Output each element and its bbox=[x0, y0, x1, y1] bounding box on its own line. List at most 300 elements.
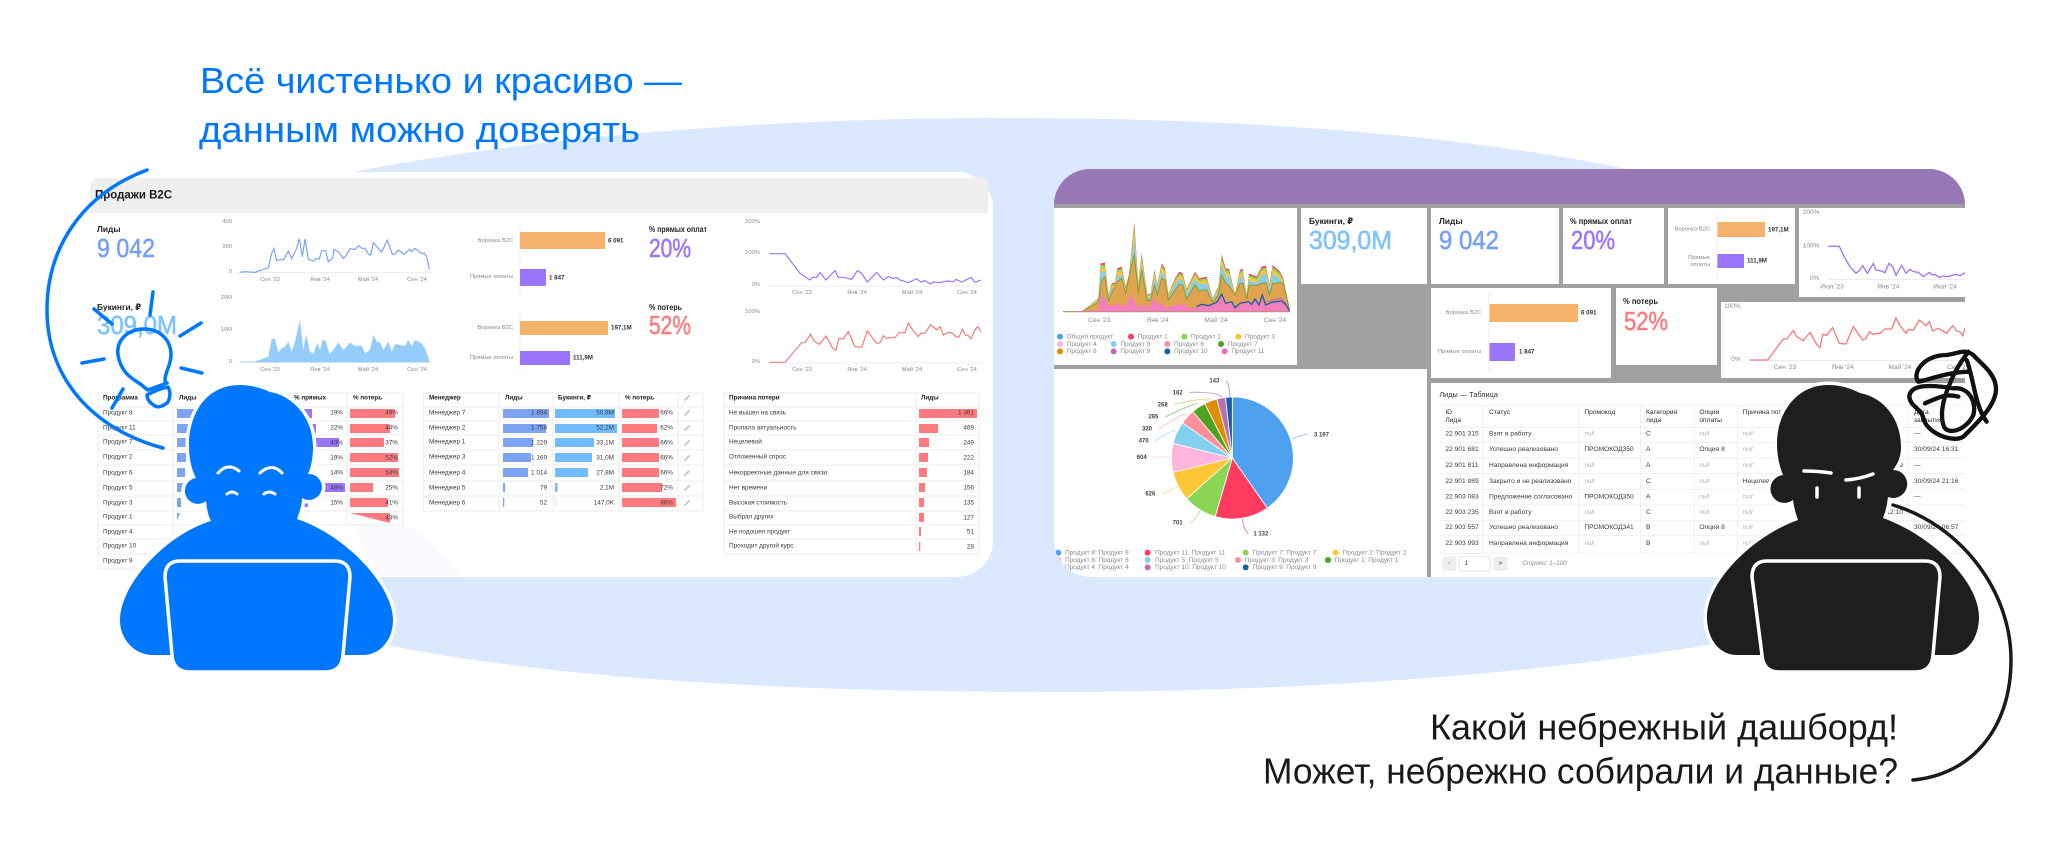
line chart: direct payments share: Сен '23 bbox=[792, 290, 812, 296]
purple header bbox=[1054, 169, 1965, 204]
background ellipse bbox=[230, 118, 1810, 692]
pie chart panel: Продукт 4: Продукт 4 bbox=[1065, 564, 1129, 571]
line chart: direct payments share: 0% bbox=[1810, 275, 1820, 282]
KPI: losses: 52% bbox=[1624, 308, 1668, 336]
title: clean dashboard caption: Всё чистенько и красиво — bbox=[200, 60, 683, 101]
line chart: losses share: 100% bbox=[745, 309, 760, 315]
table panel: ПРОМОКОД341 bbox=[1584, 524, 1634, 531]
area chart: bookings: Сен '23 bbox=[260, 367, 280, 373]
table panel: Направлена информация bbox=[1489, 462, 1569, 469]
table panel: Лида bbox=[1445, 417, 1461, 424]
table: managers: 1 014 bbox=[531, 470, 547, 476]
table: managers: 79 bbox=[540, 484, 547, 492]
table: products: Программа bbox=[103, 394, 138, 402]
table panel: лида bbox=[1646, 417, 1661, 424]
table panel: C bbox=[1646, 478, 1651, 485]
KPI: losses bbox=[1616, 288, 1717, 365]
KPI: bookings: Букинги, ₽ bbox=[1309, 216, 1353, 226]
line chart: leads: 200 bbox=[222, 244, 232, 250]
table panel: Взят в работу bbox=[1489, 429, 1532, 437]
table: loss reasons: 156 bbox=[963, 484, 974, 492]
table panel: null bbox=[1699, 462, 1710, 469]
table: products: Продукт 9 bbox=[103, 558, 133, 564]
KPI: direct payments bbox=[1563, 208, 1664, 284]
funnel chart: leads: 6 091 bbox=[608, 238, 624, 244]
stacked area chart panel bbox=[1054, 208, 1297, 365]
line chart: direct payments share: 100% bbox=[1803, 242, 1820, 249]
table panel: null bbox=[1584, 540, 1595, 547]
KPI: leads: 9 042 bbox=[1439, 227, 1499, 255]
laptop bbox=[1752, 561, 1940, 672]
table: products: 22% bbox=[330, 424, 343, 432]
stacked area chart panel: Продукт 8 bbox=[1067, 348, 1097, 355]
table: managers: 1 229 bbox=[531, 440, 547, 446]
table panel: C bbox=[1646, 509, 1651, 516]
table panel: null bbox=[1584, 478, 1595, 485]
pie chart panel: 626 bbox=[1145, 492, 1156, 498]
table panel: 30/09/24 12:49 bbox=[1859, 462, 1903, 469]
area chart: bookings: 10M bbox=[221, 327, 232, 333]
line chart: leads: 400 bbox=[222, 219, 232, 225]
KPI: leads bbox=[1431, 208, 1559, 284]
table panel: ID bbox=[1445, 409, 1452, 416]
table: managers: 52,2M bbox=[596, 424, 614, 432]
pie chart panel: 1 132 bbox=[1253, 532, 1269, 538]
line chart: direct payments share: 200% bbox=[1803, 209, 1820, 216]
stacked area chart panel: Продукт 5 bbox=[1120, 341, 1151, 348]
KPI: bookings: 309,0M bbox=[97, 312, 177, 340]
line chart: leads: Сен '23 bbox=[260, 277, 280, 283]
pie chart panel: Продукт 6: Продукт 6 bbox=[1065, 557, 1129, 564]
table panel: < bbox=[1447, 560, 1451, 567]
table panel: Категория bbox=[1646, 409, 1678, 416]
table: managers: 147,0K bbox=[594, 500, 615, 506]
KPI: leads: 9 042 bbox=[97, 235, 155, 263]
stacked area chart panel: Продукт 6 bbox=[1174, 341, 1204, 348]
table panel: null bbox=[1699, 509, 1710, 516]
bar chart: bookings funnel: 111,9M bbox=[1747, 258, 1767, 264]
table: products: 52% bbox=[385, 454, 398, 462]
table: products: 48% bbox=[330, 484, 343, 492]
table panel: 1 bbox=[1464, 560, 1468, 567]
table panel: 30/09/24 11:49 bbox=[1859, 493, 1903, 500]
pie chart panel: Продукт 5: Продукт 5 bbox=[1155, 557, 1219, 564]
KPI: bookings: Букинги, ₽ bbox=[97, 302, 141, 312]
funnel chart: bookings bbox=[470, 312, 632, 373]
KPI: losses: % потерь bbox=[649, 302, 682, 312]
line chart: direct payments share: Янв '24 bbox=[847, 290, 868, 296]
funnel chart: bookings: 197,1M bbox=[611, 324, 632, 332]
table: products: 44% bbox=[385, 424, 398, 432]
KPI: losses: % потерь bbox=[1623, 296, 1658, 306]
line chart: direct payments share: Сен '24 bbox=[957, 290, 978, 296]
table: loss reasons: Причина потери bbox=[729, 394, 780, 402]
table: products: 41% bbox=[385, 500, 398, 506]
table: loss reasons: 184 bbox=[963, 470, 974, 476]
table: loss reasons: Выбрал других bbox=[729, 512, 774, 520]
table: managers: 72% bbox=[660, 484, 673, 492]
table panel: закрытия bbox=[1914, 417, 1943, 424]
table: products: Продукт 5 bbox=[103, 484, 133, 492]
table: managers: Менеджер 1 bbox=[429, 438, 466, 446]
funnel chart: leads: Воронка B2C bbox=[477, 238, 513, 244]
table panel: 22 901 315 bbox=[1445, 430, 1479, 437]
table: managers: 50,8M bbox=[596, 410, 614, 416]
table panel: null bbox=[1743, 540, 1753, 547]
table: managers: 66% bbox=[660, 440, 673, 446]
table panel: — bbox=[1914, 430, 1921, 437]
line chart: direct payments share: Июл '23 bbox=[1820, 283, 1844, 290]
line chart: leads: 0 bbox=[229, 269, 232, 275]
pie chart panel: 295 bbox=[1148, 415, 1159, 421]
table panel: Направлена информация bbox=[1489, 540, 1569, 547]
table panel: Опция 8 bbox=[1699, 446, 1725, 453]
KPI: leads bbox=[97, 224, 155, 263]
table: products: 14% bbox=[330, 470, 343, 476]
table: products: Продукт 6 bbox=[103, 470, 133, 476]
stacked area chart panel: Продукт 1 bbox=[1138, 333, 1168, 340]
bar chart: bookings funnel: Воронка B2C bbox=[1674, 226, 1710, 232]
line chart: direct payments share: 200% bbox=[745, 219, 760, 225]
line chart: leads bbox=[222, 219, 432, 283]
table panel: оплаты bbox=[1699, 417, 1722, 424]
table: loss reasons: 222 bbox=[963, 454, 974, 462]
table: managers: 52 bbox=[540, 500, 547, 506]
pie chart panel: Продукт 3: Продукт 3 bbox=[1245, 557, 1309, 564]
dashboard header: Продажи B2C bbox=[95, 188, 173, 202]
table panel: B bbox=[1646, 540, 1651, 547]
table: loss reasons: Отложенный спрос bbox=[729, 452, 787, 460]
pie chart panel: Продукт 11: Продукт 11 bbox=[1155, 549, 1225, 556]
table panel: Причина потери bbox=[1743, 409, 1793, 416]
pie chart panel: Продукт 1: Продукт 1 bbox=[1335, 557, 1399, 564]
table panel: Статус bbox=[1489, 409, 1511, 416]
table panel: Опции bbox=[1699, 409, 1720, 416]
bar chart: leads funnel: 1 847 bbox=[1519, 348, 1535, 356]
line chart: leads: Янв '24 bbox=[310, 277, 331, 283]
stacked area chart panel: Продукт 7 bbox=[1228, 341, 1258, 348]
stacked area chart panel: Продукт 2 bbox=[1191, 333, 1221, 340]
table: managers bbox=[423, 393, 703, 511]
table panel: null bbox=[1743, 493, 1753, 500]
table: loss reasons: 249 bbox=[963, 440, 974, 446]
stacked area chart panel: Продукт 9 bbox=[1120, 348, 1151, 355]
table panel: > bbox=[1498, 560, 1502, 567]
pie chart panel: Продукт 9: Продукт 9 bbox=[1253, 564, 1317, 571]
table panel: 30/09/24 06:57 bbox=[1914, 524, 1959, 531]
laptop bbox=[165, 561, 350, 672]
line chart: direct payments share bbox=[745, 219, 983, 296]
table: managers: 66% bbox=[660, 410, 673, 416]
bar chart: leads funnel: 6 091 bbox=[1581, 310, 1597, 316]
table panel: Закрыто и не реализовано bbox=[1489, 478, 1572, 485]
table panel: B bbox=[1646, 524, 1651, 531]
table: managers: 1 894 bbox=[531, 410, 547, 416]
KPI: direct payments: % прямых оплат bbox=[649, 224, 707, 234]
table panel: null bbox=[1584, 509, 1595, 516]
bar chart: bookings funnel bbox=[1668, 208, 1795, 284]
table panel: A bbox=[1646, 446, 1651, 453]
table: managers: % потерь bbox=[625, 394, 654, 402]
table: products: 25% bbox=[385, 484, 398, 492]
table: managers: Менеджер 7 bbox=[429, 410, 466, 416]
table panel: 22 901 811 bbox=[1445, 462, 1478, 469]
table panel: Опция 8 bbox=[1699, 524, 1725, 531]
table panel: 30/09/24 12:10 bbox=[1859, 509, 1903, 516]
line chart: losses share bbox=[745, 309, 983, 373]
table panel: null bbox=[1584, 462, 1595, 469]
table: managers: 2,1M bbox=[600, 484, 614, 492]
table panel: 22 901 989 bbox=[1445, 478, 1479, 485]
table: managers: Менеджер bbox=[429, 394, 461, 402]
table panel: Успешно реализовано bbox=[1489, 446, 1558, 453]
table: loss reasons: Проходит другой курс bbox=[729, 542, 794, 550]
table: loss reasons: Высокая стоимость bbox=[729, 500, 788, 506]
KPI: leads: Лиды bbox=[97, 224, 120, 234]
table: products: 49% bbox=[385, 410, 398, 416]
table: products: % прямых bbox=[294, 394, 327, 402]
title: clean dashboard caption: данным можно доверять bbox=[199, 109, 640, 150]
line chart: losses share: Янв '24 bbox=[847, 367, 868, 373]
line chart: losses share: Сен '23 bbox=[792, 367, 812, 373]
table panel bbox=[1431, 383, 1965, 577]
stacked area chart panel: Общий продукт bbox=[1067, 332, 1113, 340]
KPI: direct payments: 20% bbox=[1571, 227, 1615, 255]
table panel: — bbox=[1914, 493, 1921, 500]
area chart: bookings bbox=[221, 295, 432, 373]
title: clean dashboard caption bbox=[199, 60, 683, 150]
line chart: direct payments share: 100% bbox=[745, 250, 760, 256]
line chart: losses share: Янв '24 bbox=[1832, 364, 1854, 371]
scribble bbox=[1909, 352, 1996, 439]
dashboard header bbox=[90, 178, 988, 213]
table panel: null bbox=[1743, 524, 1753, 531]
line chart: leads: Сен '24 bbox=[407, 277, 428, 283]
area chart: bookings: 0 bbox=[229, 359, 232, 365]
table panel: C bbox=[1646, 430, 1651, 437]
table panel: 22 903 235 bbox=[1445, 509, 1479, 516]
table panel: — bbox=[1914, 462, 1921, 469]
table panel: 22 901 681 bbox=[1445, 446, 1479, 453]
table: loss reasons: Нецелевой bbox=[729, 438, 762, 446]
table: managers: 66% bbox=[660, 454, 673, 462]
table: managers: 33,1M bbox=[596, 440, 614, 446]
funnel chart: leads: Прямые оплаты bbox=[470, 274, 513, 280]
table: loss reasons: 1 361 bbox=[958, 410, 974, 416]
arc around the idea bbox=[47, 170, 163, 448]
table panel: Предложение согласовано bbox=[1489, 493, 1573, 500]
table panel: 30/09/24 16:31 bbox=[1914, 446, 1959, 453]
KPI: direct payments: % прямых оплат bbox=[1570, 216, 1632, 226]
table: products: 19% bbox=[330, 454, 343, 462]
stacked area chart panel: Янв '24 bbox=[1147, 317, 1169, 324]
line chart: losses share bbox=[1721, 302, 1970, 378]
funnel chart: bookings: 111,9M bbox=[573, 354, 593, 362]
table: managers: 66% bbox=[660, 470, 673, 476]
pie chart panel: 268 bbox=[1158, 403, 1168, 409]
table panel: Строки: 1–100 bbox=[1522, 560, 1567, 567]
line chart: direct payments share: 0% bbox=[752, 282, 760, 288]
table panel: A bbox=[1646, 462, 1651, 469]
table: products bbox=[98, 393, 403, 569]
table: managers: 96% bbox=[660, 500, 673, 506]
table: products: Продукт 7 bbox=[103, 438, 133, 446]
table panel: Лиды — Таблица bbox=[1439, 390, 1499, 399]
funnel chart: leads: 1 847 bbox=[549, 274, 565, 282]
table: managers: Букинги, ₽ bbox=[558, 394, 592, 402]
table panel: Промокод bbox=[1584, 409, 1615, 416]
table panel: null bbox=[1584, 430, 1595, 437]
line chart: direct payments share: Май '24 bbox=[902, 289, 923, 296]
table: products: % потерь bbox=[353, 394, 382, 402]
table: products: 54% bbox=[385, 470, 398, 476]
table: loss reasons: Лиды bbox=[921, 394, 939, 402]
table: loss reasons bbox=[724, 393, 979, 554]
caption: messy dashboard: Какой небрежный дашборд! bbox=[1430, 706, 1898, 748]
table panel: Взят в работу bbox=[1489, 508, 1532, 516]
table: loss reasons: Не вышел на связь bbox=[729, 410, 787, 416]
table panel: null bbox=[1743, 430, 1753, 437]
table: managers: 62% bbox=[660, 424, 673, 432]
table: managers: 27,8M bbox=[596, 470, 614, 476]
table: products: Лиды bbox=[179, 394, 197, 402]
table: managers: 31,0M bbox=[596, 454, 614, 462]
table: products: Продукт 1 bbox=[103, 514, 133, 520]
stacked area chart panel: Сен '24 bbox=[1264, 317, 1286, 324]
bar chart: bookings funnel: Прямые bbox=[1688, 255, 1710, 261]
pie chart panel: Продукт 10: Продукт 10 bbox=[1155, 564, 1226, 571]
table panel: 22 903 557 bbox=[1445, 524, 1479, 531]
table: loss reasons: Нет времени bbox=[729, 484, 768, 492]
funnel chart: leads bbox=[470, 222, 624, 295]
table: products: 19% bbox=[330, 410, 343, 416]
line chart: direct payments share: Июл '24 bbox=[1933, 283, 1957, 290]
pie chart panel: 470 bbox=[1139, 438, 1149, 444]
pie chart panel: 701 bbox=[1173, 521, 1183, 527]
KPI: bookings bbox=[1301, 208, 1427, 284]
pie chart panel: 320 bbox=[1142, 426, 1153, 432]
table panel: ПРОМОКОД350 bbox=[1584, 493, 1634, 500]
KPI: losses: 52% bbox=[649, 312, 691, 340]
table: managers: 1 169 bbox=[531, 454, 547, 462]
area chart: bookings: Сен '24 bbox=[407, 367, 428, 373]
table: products: Продукт 4 bbox=[103, 528, 133, 536]
line chart: direct payments share: Янв '24 bbox=[1877, 283, 1900, 290]
table: managers: Менеджер 2 bbox=[429, 424, 466, 432]
table panel: 22 903 993 bbox=[1445, 540, 1479, 547]
table panel: ПРОМОКОД350 bbox=[1584, 446, 1634, 453]
pie chart panel: Продукт 8: Продукт 8 bbox=[1065, 549, 1129, 556]
table: products: Продукт 8 bbox=[103, 410, 133, 416]
table panel: null bbox=[1743, 446, 1753, 453]
table: products: 43% bbox=[385, 514, 398, 522]
caption: messy dashboard: Может, небрежно собирали и данные? bbox=[1263, 750, 1898, 792]
table: loss reasons: 28 bbox=[967, 544, 974, 550]
table: loss reasons: Не подошел продукт bbox=[729, 528, 790, 536]
table panel: 22 903 083 bbox=[1445, 493, 1479, 500]
KPI: direct payments bbox=[649, 224, 707, 263]
stacked area chart panel: Продукт 10 bbox=[1174, 348, 1208, 355]
table panel: 30/09/24 21:16 bbox=[1914, 478, 1959, 485]
table panel: Нецелевой bbox=[1743, 477, 1777, 485]
table panel: Успешно реализовано bbox=[1489, 524, 1558, 531]
area chart: bookings: 20M bbox=[221, 295, 232, 301]
line chart: losses share: 0% bbox=[752, 359, 760, 365]
stacked area chart panel: Сен '23 bbox=[1088, 317, 1111, 324]
line chart: leads: Май '24 bbox=[358, 276, 379, 283]
pie chart panel: 182 bbox=[1173, 391, 1183, 397]
pie chart panel: 3 197 bbox=[1314, 432, 1330, 438]
table panel: null bbox=[1743, 462, 1753, 469]
icon: light bulb bbox=[82, 292, 202, 408]
bar chart: leads funnel: Прямые оплаты bbox=[1438, 349, 1481, 355]
table: loss reasons: Пропала актуальность bbox=[729, 424, 797, 432]
bar chart: leads funnel bbox=[1431, 288, 1611, 378]
table: products: Продукт 10 bbox=[103, 542, 137, 550]
table panel: null bbox=[1699, 478, 1710, 485]
line chart: losses share: Сен '23 bbox=[1774, 364, 1796, 371]
KPI: bookings: 309,0M bbox=[1309, 227, 1392, 255]
caption: messy dashboard bbox=[1263, 706, 1898, 792]
table: products: Продукт 11 bbox=[103, 424, 136, 432]
stacked area chart panel: Продукт 3 bbox=[1245, 333, 1275, 340]
line chart: direct payments share bbox=[1799, 208, 1965, 297]
pie chart panel: Продукт 2: Продукт 2 bbox=[1343, 549, 1407, 556]
black person with laptop bbox=[1707, 385, 1979, 672]
pie chart panel: 604 bbox=[1137, 455, 1147, 461]
stacked area chart panel: Продукт 4 bbox=[1067, 341, 1097, 348]
table panel: null bbox=[1699, 540, 1710, 547]
table panel: Дата bbox=[1914, 409, 1929, 416]
line chart: losses share: 0% bbox=[1731, 356, 1741, 363]
stacked area chart panel: Продукт 11 bbox=[1231, 348, 1265, 355]
area chart: bookings: Янв '24 bbox=[310, 367, 331, 373]
table panel: null bbox=[1743, 509, 1753, 516]
table: managers: Менеджер 6 bbox=[429, 500, 466, 506]
table: products: 15% bbox=[330, 500, 343, 506]
pie chart panel: Продукт 7: Продукт 7 bbox=[1253, 549, 1317, 556]
pie chart panel bbox=[1054, 369, 1427, 577]
black curved line bbox=[1893, 505, 2011, 780]
table: products: 37% bbox=[385, 440, 398, 446]
stacked area chart panel: Май '24 bbox=[1205, 316, 1228, 324]
line chart: losses share: Май '24 bbox=[902, 366, 923, 373]
table: products: Продукт 2 bbox=[103, 454, 133, 460]
table: managers: Менеджер 3 bbox=[429, 454, 466, 460]
funnel chart: bookings: Воронка B2C bbox=[477, 325, 513, 331]
panel: clean dashboard bbox=[60, 172, 993, 577]
table panel: null bbox=[1699, 430, 1710, 437]
table: loss reasons: 127 bbox=[963, 514, 974, 522]
table: loss reasons: 51 bbox=[967, 528, 974, 536]
bar chart: bookings funnel: оплаты bbox=[1690, 262, 1710, 268]
table: managers: 1 758 bbox=[531, 424, 547, 432]
table: managers: Лиды bbox=[505, 394, 523, 402]
table: managers: Менеджер 4 bbox=[429, 470, 466, 476]
table: loss reasons: 135 bbox=[963, 500, 974, 506]
panel: messy dashboard bbox=[1054, 169, 1970, 577]
bar chart: leads funnel: Воронка B2C bbox=[1445, 310, 1481, 316]
line chart: losses share: Сен '24 bbox=[1947, 364, 1970, 371]
funnel chart: bookings: Прямые оплаты bbox=[470, 355, 513, 361]
area chart: bookings: Май '24 bbox=[358, 366, 379, 373]
bar chart: bookings funnel: 197,1M bbox=[1768, 226, 1789, 234]
table: loss reasons: 469 bbox=[963, 424, 974, 432]
table panel: A bbox=[1646, 493, 1651, 500]
KPI: leads: Лиды bbox=[1439, 216, 1462, 226]
table panel: null bbox=[1699, 493, 1710, 500]
blue person with laptop bbox=[120, 385, 393, 672]
